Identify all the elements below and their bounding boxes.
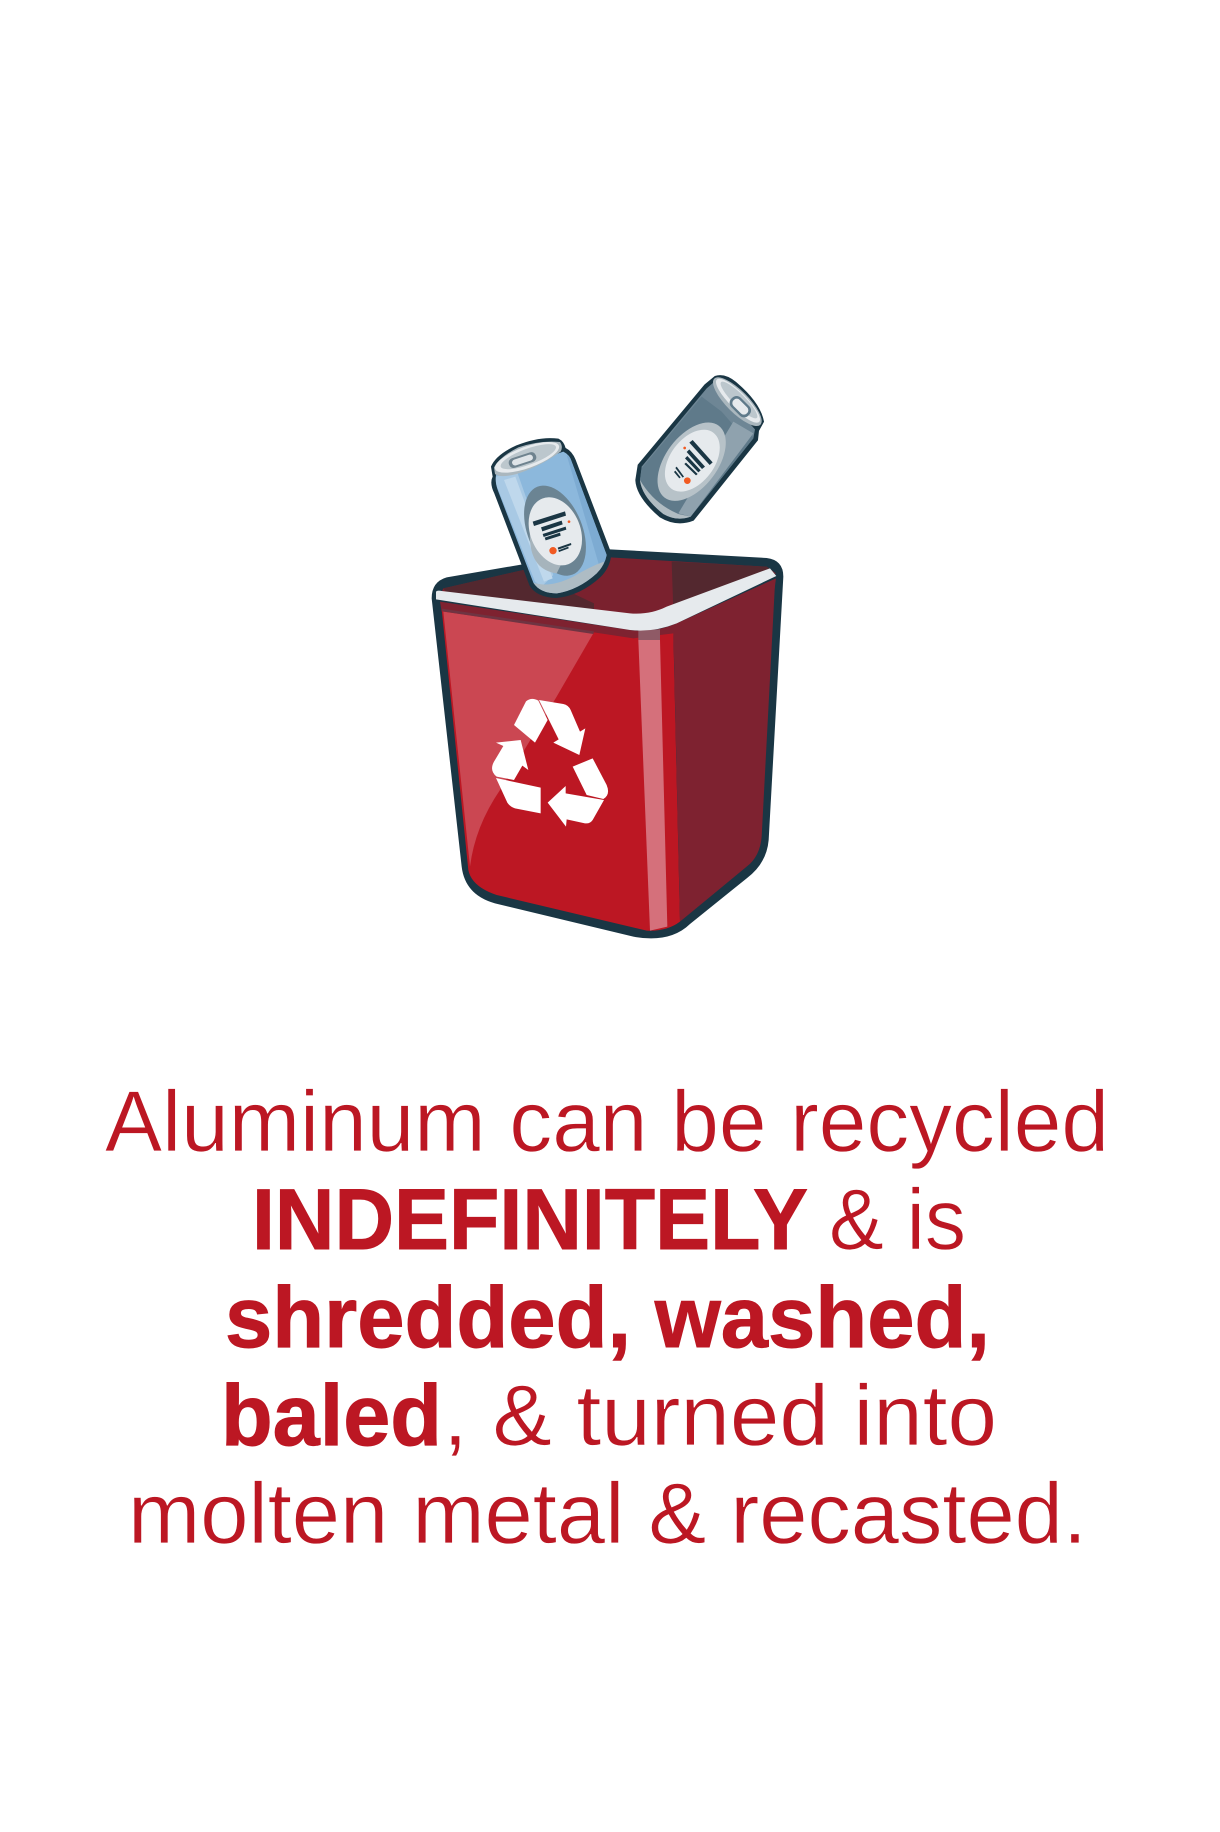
- line 3 bold: shredded, washed,: [225, 1270, 990, 1366]
- line 4 regular: , & turned into: [443, 1368, 997, 1464]
- line 4 bold: baled: [221, 1368, 442, 1464]
- recycling bin: [432, 549, 783, 938]
- icon: blue aluminum can: [491, 436, 611, 597]
- line 5: molten metal & recasted.: [128, 1466, 1087, 1562]
- line 2 regular: & is: [829, 1172, 966, 1268]
- icon: recycling symbol: [492, 699, 608, 827]
- illustration: recycling bin with cans: [432, 371, 783, 938]
- text block: recycling statement: [105, 1074, 1109, 1562]
- line 1: Aluminum can be recycled: [105, 1074, 1109, 1170]
- line 2 bold: INDEFINITELY: [252, 1172, 808, 1268]
- icon: grey aluminum can: [636, 371, 768, 523]
